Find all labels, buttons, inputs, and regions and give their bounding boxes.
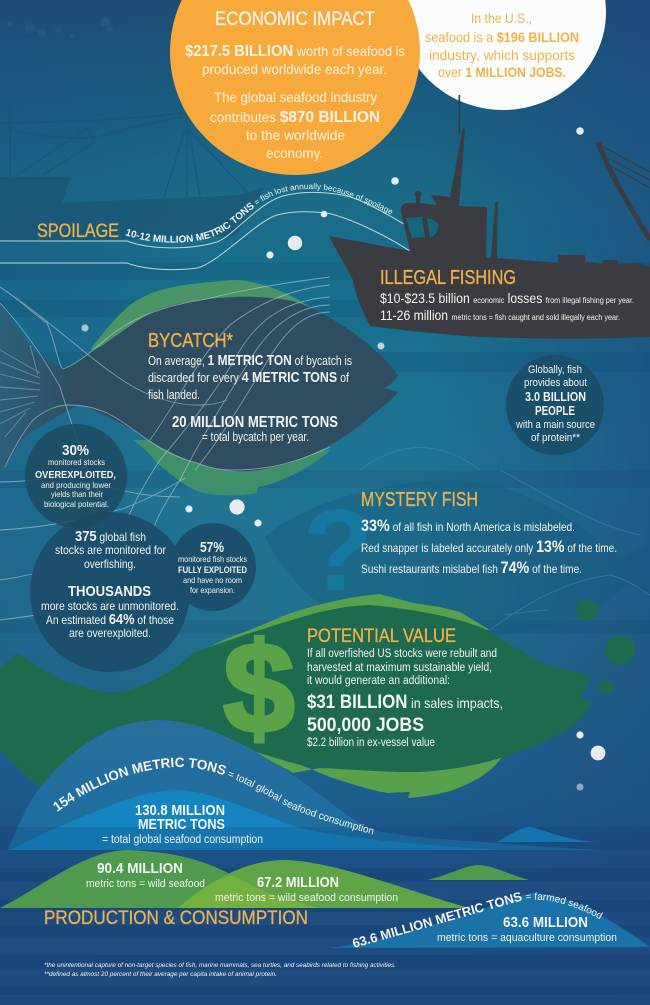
circle: 30% overexploited (25, 424, 127, 528)
text: monitored stocks: THOUSANDS (68, 583, 151, 600)
text: 30%: 30% (62, 442, 89, 459)
text: 57%: and have no room (183, 575, 242, 585)
text: 63.6 million (437, 914, 617, 944)
heading: economic impact: ECONOMIC IMPACT (215, 9, 375, 30)
text: potential value: harvested at maximum sustainable yield, (307, 662, 492, 674)
blue consumption hills (8, 720, 596, 850)
heading: illegal fishing: ILLEGAL FISHING (380, 267, 516, 289)
text: 30%: biological potential. (44, 499, 109, 509)
fish body (0, 297, 398, 471)
text block: economic impact: contributes $870 BILLION (210, 109, 380, 126)
text: U.S. seafood (425, 10, 579, 80)
text: bycatch: On average, 1 METRIC TON of bycatch is (148, 353, 352, 369)
fins (90, 280, 330, 350)
text: 90.4 million: 90.4 MILLION (97, 860, 183, 877)
large stock circle (30, 512, 190, 672)
text: 67.2 million: 67.2 MILLION (257, 874, 339, 891)
dots (81, 127, 605, 791)
text: 90.4 million (86, 860, 205, 890)
text: monitored stocks: more stocks are unmonitored. (41, 599, 179, 613)
text: 130.8 million: = total global seafood consumption (102, 834, 263, 846)
text: potential value: If all overfished US stocks were rebuilt and (307, 648, 497, 660)
text: protein: of protein** (531, 432, 581, 444)
text: monitored stocks: 375 global fish (75, 528, 146, 545)
illegal fishing ship (329, 95, 650, 339)
heading: bycatch: BYCATCH* (148, 330, 233, 352)
text block: economic impact: economy. (266, 145, 323, 161)
text: mystery fish (361, 516, 617, 577)
text: protein: 3.0 BILLION (525, 390, 586, 404)
text: 67.2 million: metric tons = wild seafood consumption (215, 892, 398, 904)
curved label: global consumption: 154 MILLION METRIC TONS = total global seafood consumption (53, 758, 374, 834)
text: protein: Globally, fish (528, 364, 582, 376)
text: potential value: $2.2 billion in ex-vessel value (307, 737, 435, 749)
text: 63.6 million: 63.6 MILLION (503, 914, 588, 931)
icon: dollar sign: $ (223, 617, 295, 760)
text: mystery fish: 33% of all fish in North America is mislabeled. (361, 516, 575, 535)
text: 63.6 million: metric tons = aquaculture consumption (437, 932, 617, 944)
curved label: spoilage: 10-12 MILLION METRIC TONS = fish lost annually because of spoilage (126, 183, 392, 243)
text: mystery fish: Red snapper is labeled accurately only 13% of the time. (361, 537, 617, 556)
green fins (193, 594, 490, 657)
text: potential value: 500,000 JOBS (307, 715, 424, 736)
texture: top blotches (7, 17, 113, 38)
text: protein: PEOPLE (535, 404, 575, 418)
text: 30%: yields than their (51, 489, 103, 499)
text: 57% (178, 540, 247, 595)
wavy white lines (0, 192, 423, 270)
text block: economic impact: to the worldwide (246, 127, 345, 143)
text: protein: with a main source (515, 419, 595, 431)
text: bycatch: = total bycatch per year. (202, 430, 309, 444)
text: 130.8 million: METRIC TONS (138, 816, 225, 833)
heading: potential value: POTENTIAL VALUE (307, 626, 456, 647)
text block: economic impact: The global seafood industry (214, 89, 377, 105)
text block: economic impact: produced worldwide each year. (202, 61, 387, 77)
circle: U.S. seafood (400, 0, 606, 110)
text: bycatch: 20 MILLION METRIC TONS (172, 414, 338, 431)
text: 30%: and producing lower (41, 480, 111, 490)
text: 130.8 million: 130.8 MILLION (135, 802, 225, 819)
text: bycatch (148, 353, 352, 444)
green dots (576, 599, 635, 694)
fish body (0, 605, 593, 787)
text: monitored stocks (41, 528, 179, 640)
heading: mystery fish: MYSTERY FISH (361, 489, 478, 511)
text: 30% (35, 442, 116, 509)
text: U.S. seafood: In the U.S., (471, 10, 532, 26)
text: 57%: 57% (200, 540, 224, 556)
net lines (0, 277, 330, 620)
text: 90.4 million: metric tons = wild seafood (86, 878, 205, 890)
text: monitored stocks: overfishing. (84, 557, 136, 571)
text: monitored stocks: are overexploited. (69, 626, 151, 640)
circle: protein (506, 355, 604, 455)
text: bycatch: discarded for every 4 METRIC TONS of (148, 370, 349, 386)
text: 130.8 million (102, 802, 263, 846)
text: potential value: it would generate an additional: (307, 675, 450, 687)
text: U.S. seafood: industry, which supports (429, 47, 575, 63)
mystery fish (265, 448, 650, 640)
text: 57%: monitored fish stocks (178, 554, 247, 564)
text: potential value (307, 648, 503, 749)
text: 57%: FULLY EXPLOITED (178, 565, 247, 576)
footnotes: *the unintentional capture of non-target species of fish, marine mammals, sea turtles, and seabirds related to fishing activities. (44, 962, 396, 969)
icon: question mark: ? (303, 485, 373, 615)
footnotes (44, 962, 396, 978)
heading: spoilage: SPOILAGE (37, 221, 119, 242)
text block: economic impact (185, 43, 405, 161)
text: protein (515, 364, 595, 444)
text: protein: provides about (524, 377, 587, 389)
illegal fishing ship: 11-26 million metric tons = fish caught and sold illegally each year. (380, 308, 620, 323)
text: 57%: for expansion. (190, 585, 235, 595)
text: U.S. seafood: seafood is a $196 BILLION (425, 29, 579, 45)
green production hills (0, 850, 529, 908)
circle: economic impact (170, 0, 420, 175)
footnotes: **defined as almost 20 percent of their average per capita intake of animal protein. (44, 971, 277, 978)
curved label: farmed seafood: 63.6 MILLION METRIC TONS = farmed seafood (352, 892, 603, 948)
circle: 57% fully exploited (170, 523, 256, 611)
ghost ship silhouette (0, 85, 265, 243)
text: U.S. seafood: over 1 MILLION JOBS. (438, 64, 566, 80)
potential value fish (0, 594, 635, 798)
blue aquaculture hill (329, 892, 650, 948)
text: 30%: OVEREXPLOITED, (35, 469, 116, 481)
text: bycatch: fish landed. (148, 388, 200, 402)
text: monitored stocks: An estimated 64% of those (46, 611, 174, 628)
bycatch fish (0, 280, 398, 495)
text: illegal fishing: $10-$23.5 billion economic losses from illegal fishing per year. (380, 291, 634, 306)
text: mystery fish: Sushi restaurants mislabel fish 74% of the time. (361, 558, 582, 577)
text: potential value: $31 BILLION in sales impacts, (307, 692, 503, 713)
heading: production and consumption: PRODUCTION & CONSUMPTION (44, 908, 308, 929)
text: 30%: monitored stocks (48, 457, 105, 467)
text: monitored stocks: stocks are monitored for (55, 543, 166, 557)
text block: economic impact: $217.5 BILLION worth of seafood is (185, 43, 405, 60)
text: 67.2 million (215, 874, 398, 904)
